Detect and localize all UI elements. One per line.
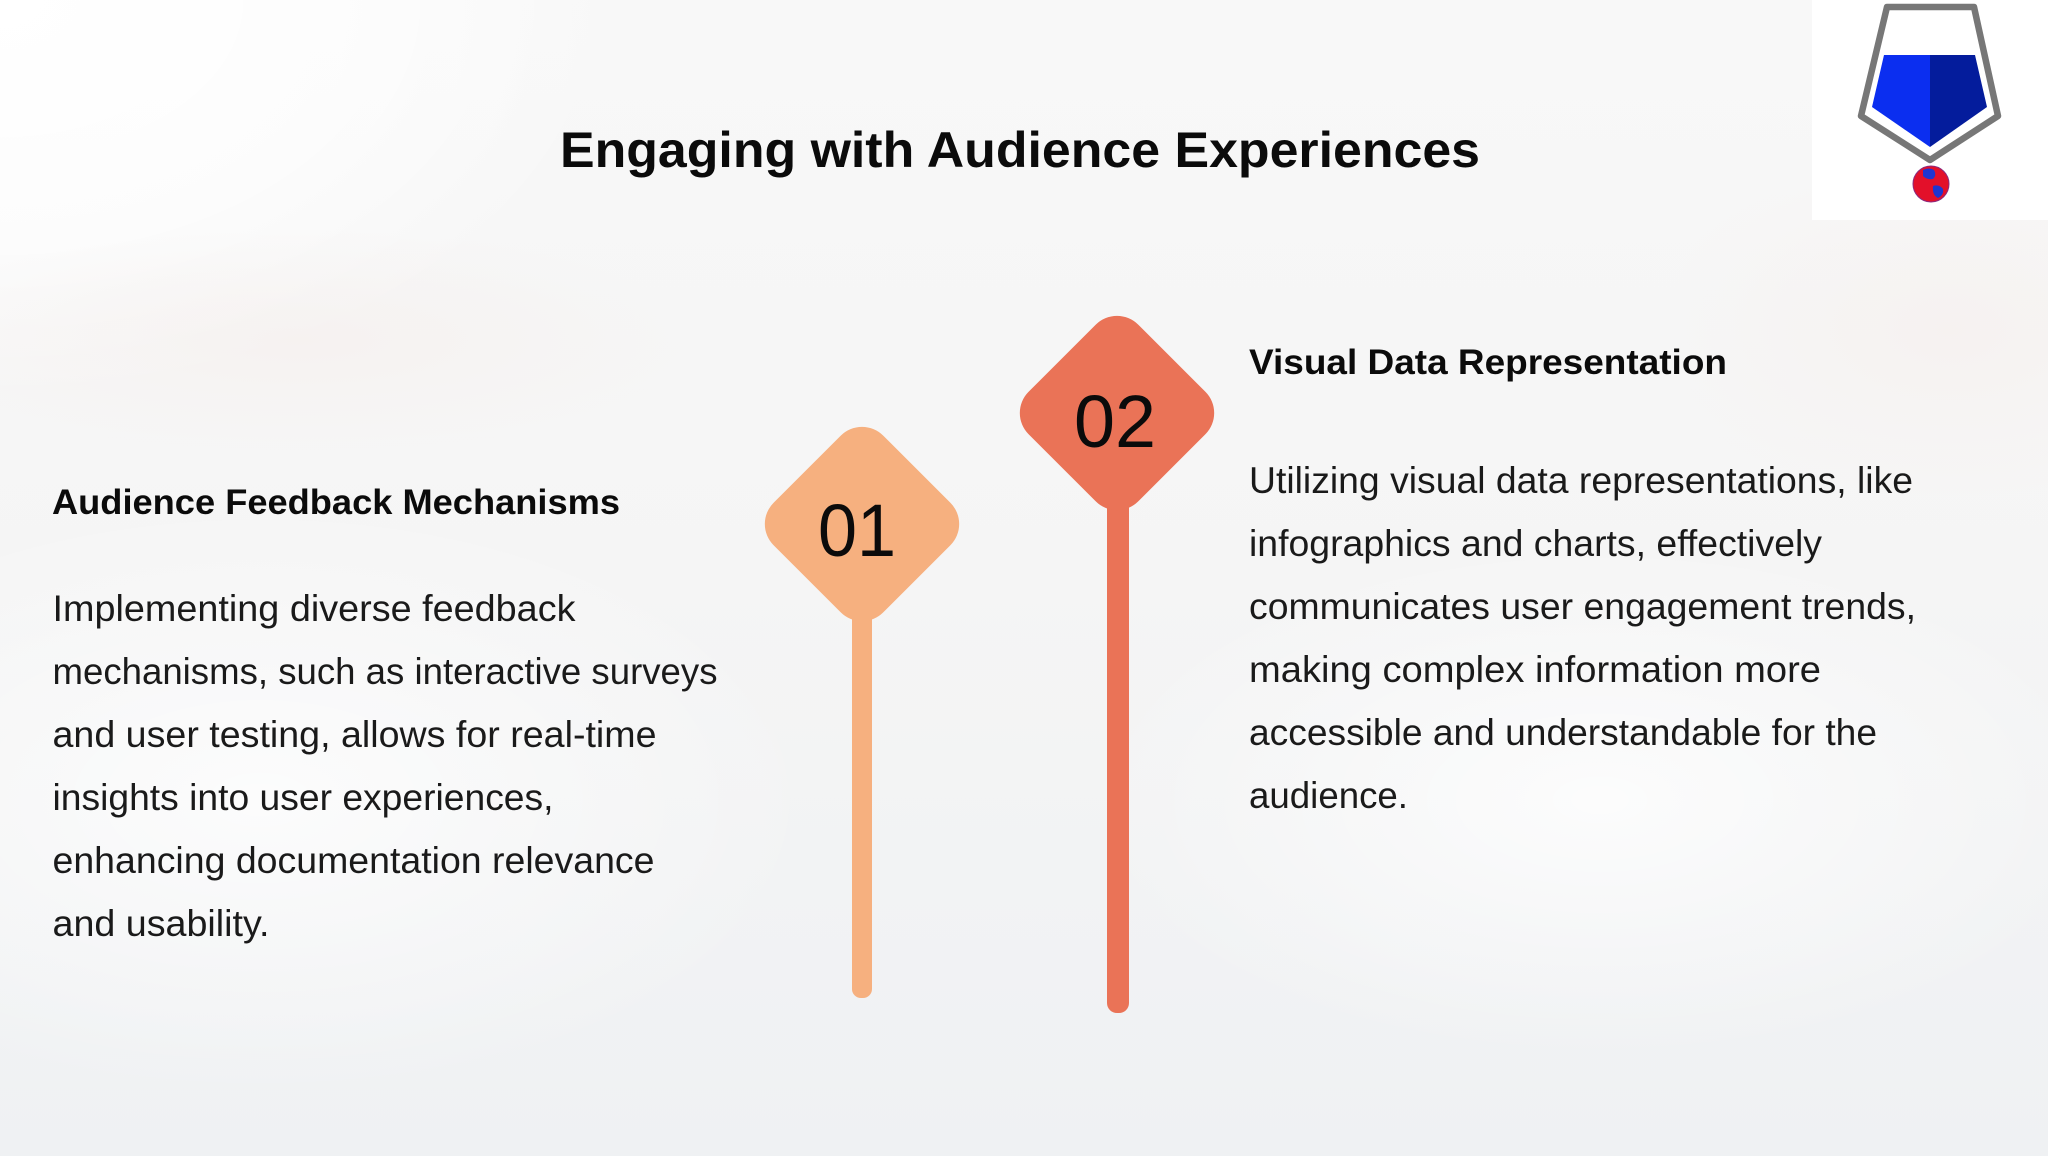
text block: visual data body: infographics and charts, effectively: [1249, 523, 1822, 564]
logo: [1812, 0, 2048, 220]
text block: visual data body: communicates user engagement trends,: [1249, 586, 1916, 627]
text block: visual data body: [1249, 460, 1916, 816]
number 01: 01: [818, 489, 896, 572]
text block: audience feedback body: [52, 588, 718, 944]
icon: pentagon badge outline: [1861, 7, 1998, 160]
text block: audience feedback body: Implementing diverse feedback: [52, 588, 576, 629]
panel: audience feedback mechanisms: [52, 483, 718, 944]
text block: audience feedback body: and usability.: [52, 903, 270, 944]
title: Engaging with Audience Experiences: [560, 122, 1480, 178]
marker 02: [1007, 303, 1227, 1013]
text block: visual data body: audience.: [1249, 775, 1408, 816]
panel: visual data representation: [1249, 343, 1916, 816]
marker 01: [752, 414, 972, 998]
text block: visual data body: Utilizing visual data representations, like: [1249, 460, 1913, 501]
icon: blue pentagon fill: [1872, 55, 1987, 147]
heading: audience feedback: Audience Feedback Mechanisms: [52, 483, 620, 522]
heading: visual data: Visual Data Representation: [1249, 343, 1727, 382]
text block: audience feedback body: enhancing documentation relevance: [52, 840, 654, 881]
text block: audience feedback body: mechanisms, such as interactive surveys: [52, 651, 718, 692]
text block: audience feedback body: and user testing, allows for real-time: [52, 714, 656, 755]
text block: visual data body: making complex information more: [1249, 649, 1821, 690]
text block: visual data body: accessible and understandable for the: [1249, 712, 1877, 753]
number 02: 02: [1074, 380, 1156, 463]
icon: globe: [1913, 166, 1949, 202]
text block: audience feedback body: insights into user experiences,: [52, 777, 554, 818]
